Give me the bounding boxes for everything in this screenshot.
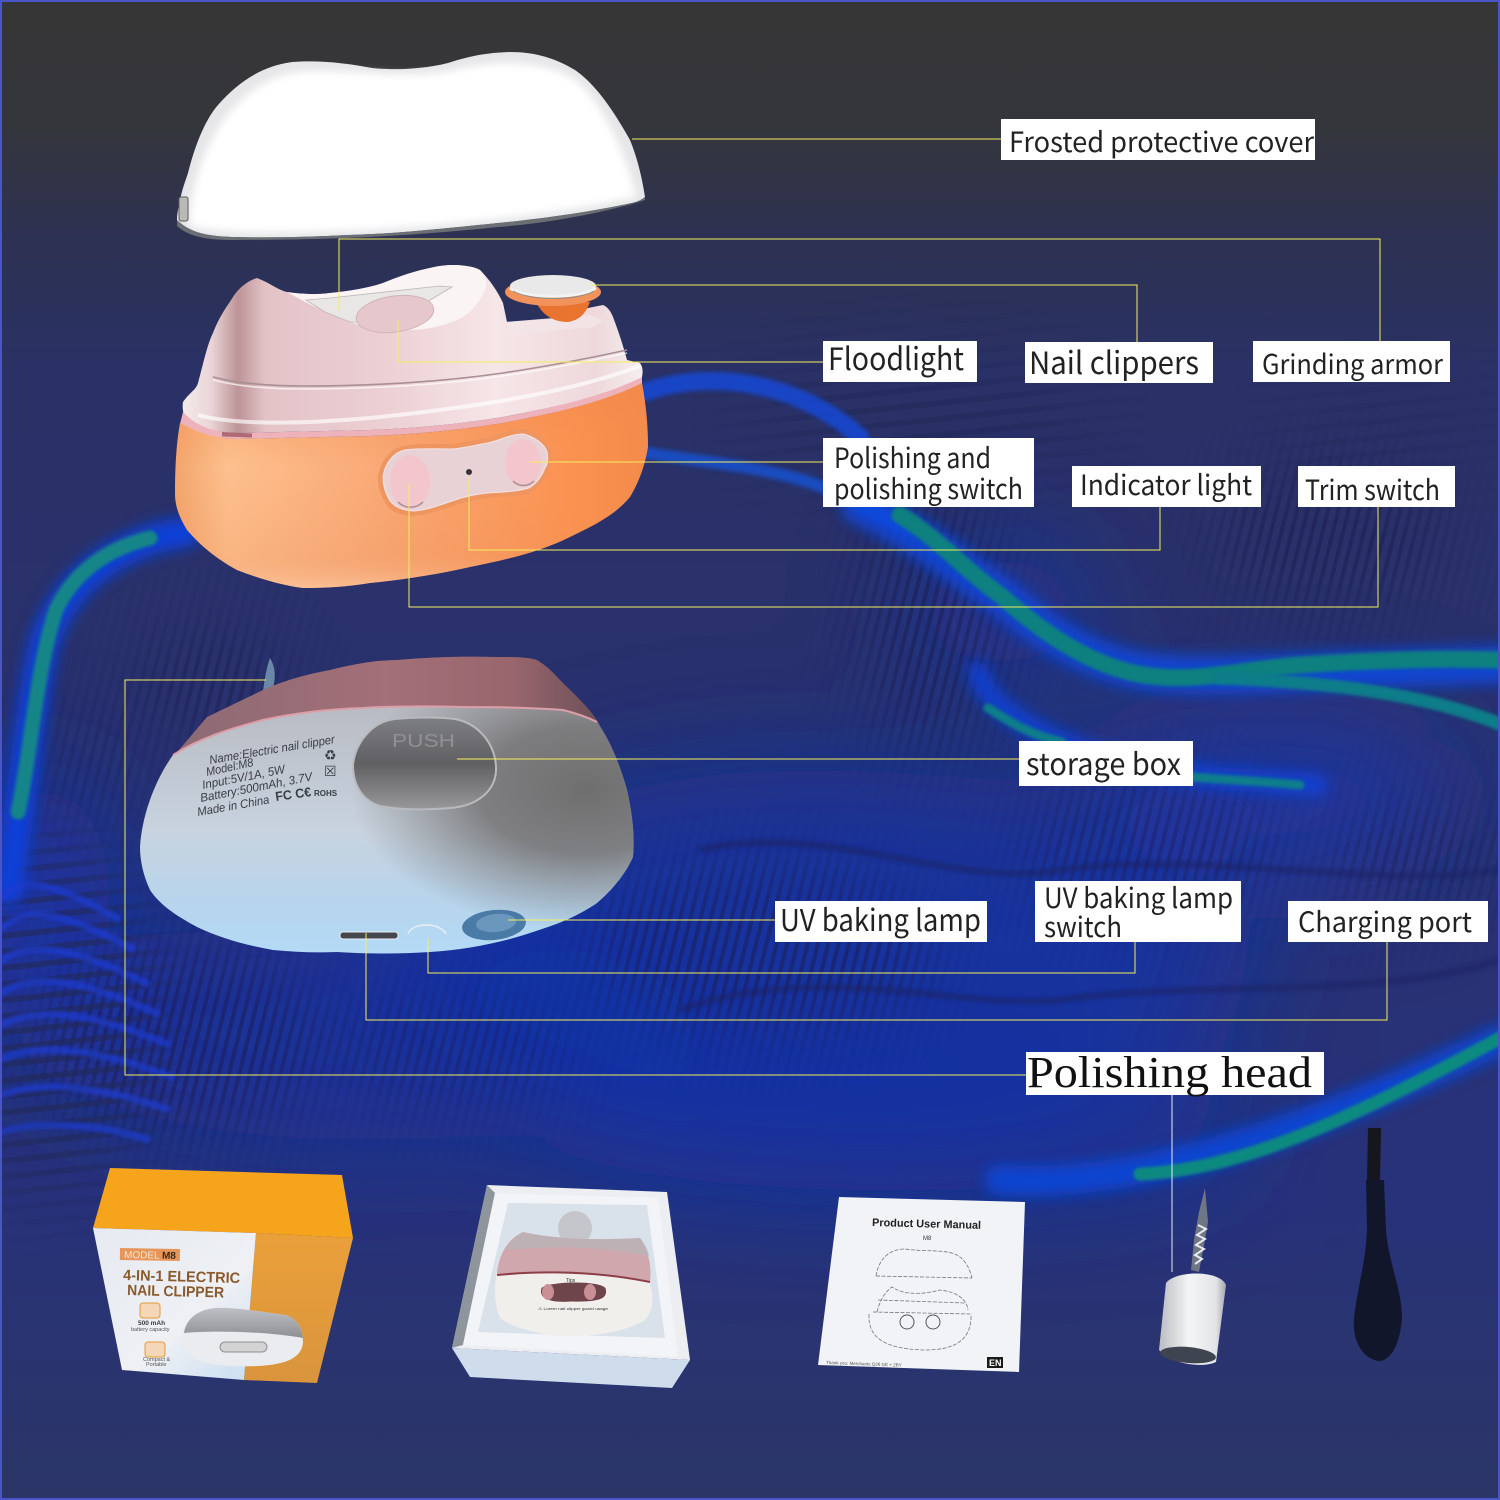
- label: Polishing and polishing switch: polishing switch: [834, 468, 1023, 508]
- label: Nail clippers: Nail clippers: [1029, 338, 1199, 383]
- retail box: MODEL M8: [124, 1250, 176, 1262]
- device underside: ROHS: [314, 789, 338, 798]
- storage ribbon branch: [978, 672, 1317, 785]
- retail box: 4-IN-1 ELECTRIC: [123, 1267, 240, 1287]
- device: grinding dial: [505, 275, 601, 322]
- user manual: [818, 1197, 1025, 1372]
- main ribbon halo: [860, 505, 1500, 675]
- device underside: Name:Electric nail clipper: [208, 732, 337, 767]
- retail box: [93, 1168, 353, 1383]
- device underside: FC C€: [274, 784, 312, 804]
- label: Indicator light: Indicator light: [1080, 464, 1252, 504]
- label: Grinding armor: Grinding armor: [1262, 343, 1443, 382]
- leader lines: [125, 139, 1387, 1272]
- device underside: ♻: [324, 747, 337, 763]
- device underside: Made in China: [196, 792, 271, 819]
- retail box: battery capacity: [131, 1327, 170, 1333]
- retail box: Portable: [146, 1362, 166, 1368]
- cleaning brush: [1354, 1128, 1402, 1361]
- retail box: 500 mAh: [138, 1320, 165, 1327]
- label: storage box: storage box: [1026, 740, 1181, 784]
- opened gift box: Tips: [566, 1278, 576, 1284]
- opened gift box: [452, 1185, 690, 1388]
- label: UV baking lamp switch: [1035, 877, 1241, 946]
- device underside: Input:5V/1A, 5W: [201, 762, 288, 792]
- opened gift box: ⚠ Lorem nail clipper guard usage: [538, 1306, 609, 1311]
- device underside: Battery:500mAh, 3.7V: [199, 769, 314, 805]
- device: switch panel: [378, 429, 552, 516]
- device underside: ☒: [324, 763, 337, 779]
- bottom ribbon: [1000, 1040, 1500, 1181]
- label: Polishing and polishing switch: Polishing and: [834, 437, 991, 477]
- main teal ribbon: [900, 515, 1500, 678]
- upper right arc: [645, 381, 860, 437]
- label: UV baking lamp switch: UV baking lamp: [1044, 877, 1233, 917]
- label: Trim switch: Trim switch: [1305, 469, 1440, 509]
- label: UV baking lamp switch: switch: [1044, 906, 1122, 946]
- label: Charging port: Charging port: [1298, 901, 1472, 941]
- device underside: [140, 657, 634, 954]
- device: orange base: [175, 383, 648, 588]
- user manual: Thank you: Merchants Q26 GE + 2BY: [826, 1360, 902, 1368]
- retail box: Compact &: [143, 1357, 171, 1363]
- label: Polishing head: Polishing head: [1027, 1048, 1312, 1097]
- device: top pink housing: [180, 265, 643, 439]
- retail box: NAIL CLIPPER: [127, 1282, 224, 1302]
- label: Floodlight: Floodlight: [828, 334, 964, 379]
- label: Polishing and polishing switch: [823, 437, 1034, 508]
- frosted protective cover: [177, 52, 645, 240]
- device underside: PUSH: [392, 731, 455, 751]
- user manual: Product User Manual: [872, 1217, 981, 1232]
- left ribbon: [8, 532, 186, 890]
- moire left bands: [0, 885, 175, 1140]
- polishing head: [1159, 1188, 1226, 1365]
- label: Frosted protective cover: Frosted protective cover: [1009, 121, 1314, 161]
- device underside: Model:M8: [205, 755, 255, 779]
- user manual: EN: [989, 1358, 1002, 1368]
- label: UV baking lamp: UV baking lamp: [780, 896, 981, 940]
- user manual: M8: [923, 1236, 932, 1242]
